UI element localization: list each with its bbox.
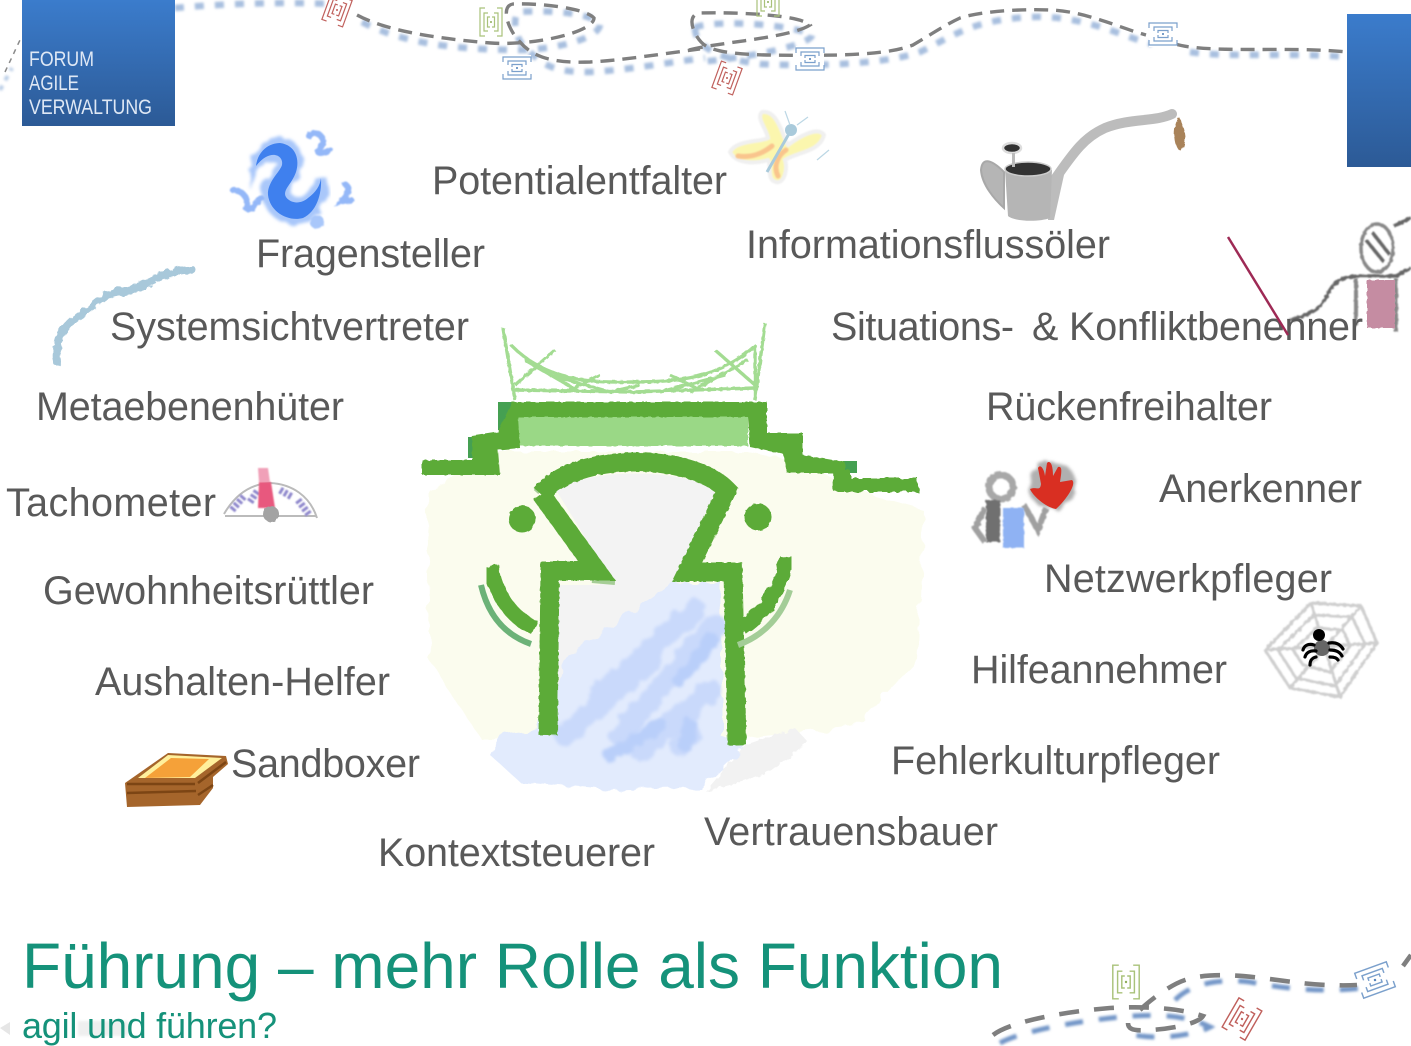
labels: Vertrauensbauer <box>704 810 998 854</box>
labels: Tachometer <box>6 481 216 525</box>
labels: Rückenfreihalter <box>986 385 1272 429</box>
labels: Metaebenenhüter <box>36 385 344 429</box>
icon: watering can <box>981 114 1185 221</box>
labels: Hilfeannehmer <box>971 648 1227 692</box>
bridge deck and steps <box>422 402 845 475</box>
labels: Potentialentfalter <box>432 159 727 203</box>
icon: spider web <box>1265 603 1377 697</box>
header box: Forum Agile Verwaltung: AGILE <box>29 72 79 95</box>
water <box>490 583 745 790</box>
cream background <box>427 452 923 738</box>
water streaks <box>565 610 715 750</box>
bridge cables <box>503 323 765 400</box>
red pointer line <box>1228 237 1288 335</box>
labels <box>6 159 1363 875</box>
subtitle: agil und führen? <box>22 1005 277 1046</box>
eyes <box>508 506 536 532</box>
shadow patch <box>705 728 808 792</box>
icon: red target bottom <box>1222 998 1262 1040</box>
labels: Kontextsteuerer <box>378 831 655 875</box>
icon: green target top <box>757 0 779 16</box>
labels: Fragensteller <box>256 232 485 276</box>
labels: Netzwerkpfleger <box>1044 557 1332 601</box>
dashed journey line: bottom <box>993 955 1411 1043</box>
header box: Forum Agile Verwaltung: VERWALTUNG <box>29 96 152 119</box>
icon: hand and person <box>975 461 1076 548</box>
icon: green target bottom <box>1113 965 1139 999</box>
bridge deck fill <box>518 417 748 446</box>
dashed journey line: top <box>0 0 1347 95</box>
icon: question marks <box>233 133 351 229</box>
bridge right end <box>833 470 918 492</box>
icon: green target <box>480 8 502 36</box>
bridge dark shading <box>468 402 857 473</box>
labels: Informationsflussöler <box>746 223 1110 267</box>
blue side box <box>1347 14 1411 167</box>
icon: sandbox <box>125 753 228 807</box>
arms <box>481 585 531 644</box>
water dark streaks <box>610 640 712 755</box>
labels: Gewohnheitsrüttler <box>43 569 374 613</box>
interior of the figure <box>555 474 720 740</box>
header box: Forum Agile Verwaltung: FORUM <box>29 48 94 71</box>
labels: Situations- <box>831 305 1014 349</box>
illustration: bridge figure <box>422 323 923 792</box>
figure outline <box>541 462 737 745</box>
icon: blue target bottom <box>1354 960 1396 1000</box>
icon: blue target <box>503 55 531 81</box>
header box: Forum Agile Verwaltung <box>22 0 175 126</box>
labels: & Konfliktbenenner <box>1032 305 1363 349</box>
labels: Systemsichtvertreter <box>110 305 469 349</box>
icon: butterfly <box>730 111 829 182</box>
labels: Sandboxer <box>231 742 420 786</box>
labels: Anerkenner <box>1159 467 1362 511</box>
icon: blue target right <box>1149 21 1177 47</box>
icon: red target <box>322 0 352 27</box>
icon: tachometer <box>224 468 317 522</box>
icon: red target lower <box>712 61 742 95</box>
labels: Aushalten-Helfer <box>95 660 390 704</box>
icon: person with pink coat <box>1290 218 1411 332</box>
icon: blue system line <box>57 270 192 362</box>
icon: blue target middle <box>796 46 824 72</box>
labels: Fehlerkulturpfleger <box>891 739 1220 783</box>
title: Führung – mehr Rolle als Funktion <box>22 930 1003 1002</box>
figure shading <box>536 458 732 582</box>
